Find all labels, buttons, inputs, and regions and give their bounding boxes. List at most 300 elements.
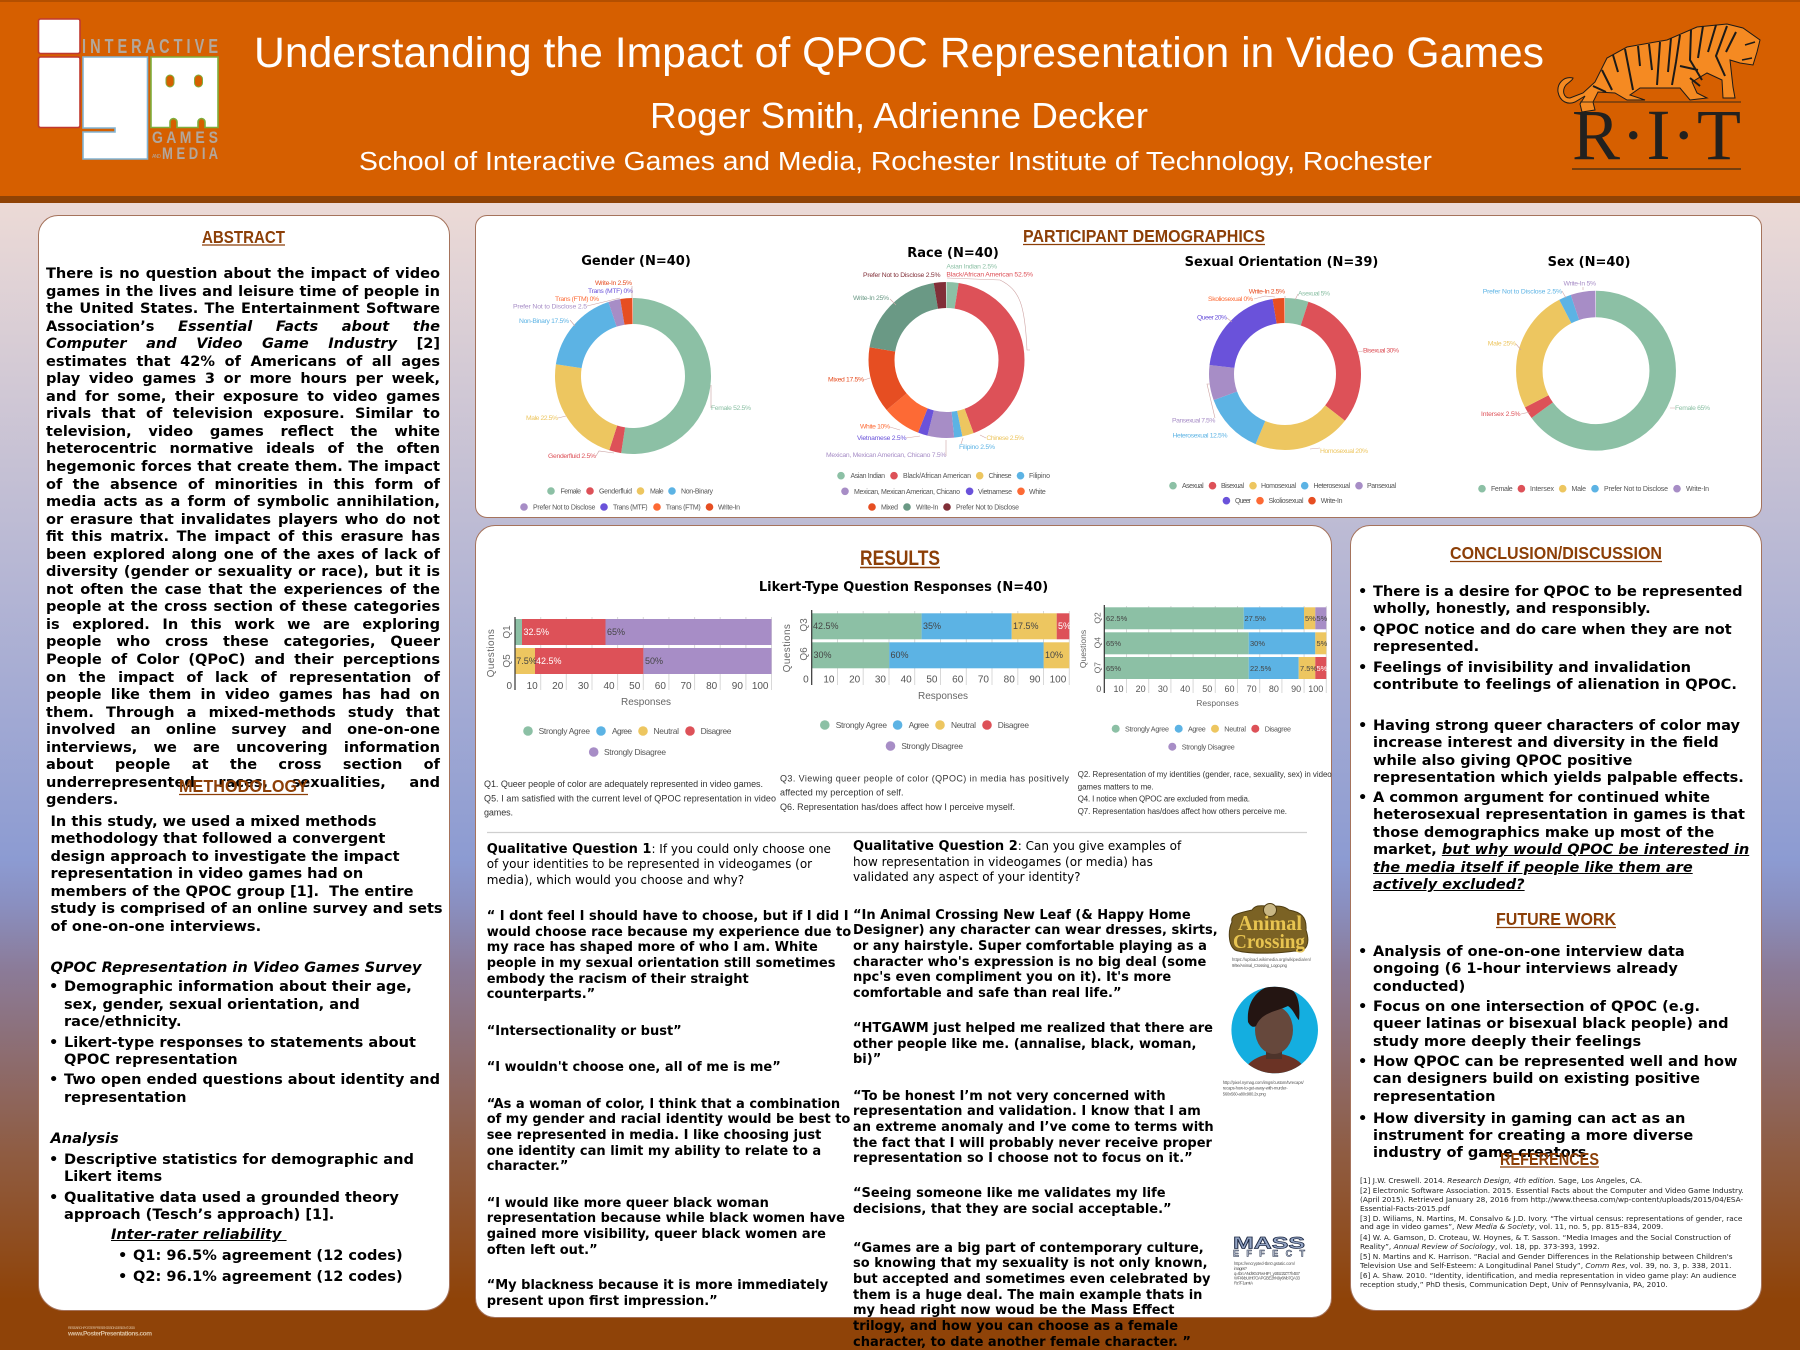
chart: Q3 and Q6 stacked bars: 60% <box>890 650 909 660</box>
text: methodology intro: study is comprised of an online survey and sets <box>50 900 443 917</box>
chart: race donut: Mixed <box>881 504 898 512</box>
future work bullet: focus: queer latinas or bisexual black people) and <box>1373 1015 1729 1032</box>
chart: Q2, Q4 and Q7 stacked bars: 80 <box>1269 684 1279 694</box>
chart: sexual orientation donut: Asexual 5% <box>1298 290 1330 298</box>
chart: Q3 and Q6 stacked bars: Strongly Agree <box>836 720 887 730</box>
bullet: qualitative data <box>64 1188 399 1223</box>
future work bullet: analysis: ongoing (6 1-hour interviews already <box>1373 960 1678 977</box>
chart: gender donut: Write-In <box>718 504 740 512</box>
future work bullet: diversity: instrument for creating a more diverse <box>1373 1127 1693 1144</box>
chart: race donut: Race (N=40) <box>907 246 999 261</box>
logo: IGM Interactive Games and Media: G A M E S <box>152 128 218 147</box>
divider between charts and qualitative answers <box>487 832 1307 834</box>
chart: sex donut: Write-In <box>1686 486 1709 493</box>
chart: Q2, Q4 and Q7 stacked bars: 30 <box>1158 684 1168 694</box>
image caption: Animal Crossing source: https://upload.wikimedia.org/wikipedia/en/ <box>1232 957 1312 962</box>
logo: IGM Interactive Games and Media: M E D I A <box>162 144 218 163</box>
chart: sex donut: Intersex <box>1530 486 1554 493</box>
logo: IGM Interactive Games and Media: I N T E R A C T I V E <box>82 36 218 58</box>
chart: sex donut <box>1478 255 1710 493</box>
quote: validates decisions: “Seeing someone like me validates my life <box>853 1186 1166 1201</box>
image caption: Mass Effect source: WFKkbUIHt7OAPGBE2hN9y6Nb7QA33 <box>1234 1276 1301 1281</box>
references list: [6] A. Shaw. 2010. “Identity, identification, and media representation in video game play: An audience <box>1360 1271 1736 1280</box>
image caption: Mass Effect source: https://encrypted-tbn0.gstatic.com/ <box>1234 1261 1296 1266</box>
image caption: portrait source <box>1223 1080 1305 1096</box>
chart: race donut: Black/African American 52.5% <box>946 272 1033 278</box>
chart: sex donut: Male 25% <box>1488 340 1516 348</box>
conclusion bullet: common argument: those demographics make up most of the <box>1373 824 1714 841</box>
quote: should not have to choose: counterparts.” <box>487 987 595 1002</box>
text: abstract: people at the cross section of these categories <box>46 598 440 615</box>
chart: race donut: Write-In <box>916 504 938 512</box>
image caption: portrait source: recaps-how-to-get-away-with-murder- <box>1223 1086 1288 1091</box>
qualitative question 1: media), which would you choose and why? <box>487 873 744 887</box>
chart: sexual orientation donut: Skoliosexual <box>1268 498 1304 505</box>
chart: sexual orientation donut: Write-In 2.5% <box>1249 288 1285 296</box>
chart: Q2, Q4 and Q7 stacked bars: Q4 <box>1092 637 1102 648</box>
chart: Q3 and Q6 stacked bars: 50 <box>926 674 938 686</box>
quote: HTGAWM: bi)” <box>853 1052 881 1067</box>
quote: not concerned: an extreme anomaly and I’ve come to terms with <box>853 1120 1214 1135</box>
text: abstract: them. Through a mixed-methods study that <box>46 704 440 721</box>
chart: sex donut: Prefer Not to Disclose <box>1604 486 1668 493</box>
chart: Q1 and Q5 stacked bars: 30 <box>578 681 589 692</box>
chart: Q3 and Q6 stacked bars: Q6 <box>799 647 810 661</box>
qualitative question 1 <box>487 842 831 887</box>
chart: Q2, Q4 and Q7 stacked bars: 5% <box>1316 664 1328 673</box>
future work bullet: analysis <box>1373 943 1685 995</box>
quote: Mass Effect <box>853 1240 1210 1350</box>
bullet: open ended questions: representation <box>64 1089 186 1106</box>
text: abstract: involved an online survey and one-on-one <box>46 721 440 738</box>
conclusion bullet: notice <box>1373 621 1732 656</box>
text: abstract: people like them in video games has had on <box>46 686 440 703</box>
quote: my blackness: present upon first impression.” <box>487 1294 718 1309</box>
references list: Essential-Facts-2015.pdf <box>1360 1204 1450 1213</box>
chart: Q2, Q4 and Q7 stacked bars: 50 <box>1202 684 1212 694</box>
text: abstract: rivals that of television exposure. Similar to <box>46 405 440 422</box>
quote: not concerned: the fact that I will probably never receive proper <box>853 1136 1212 1151</box>
image: Mass Effect logo: EFFECT <box>1233 1248 1306 1258</box>
conclusion bullet: notice: represented. <box>1373 638 1479 655</box>
chart: sex donut: Sex (N=40) <box>1548 255 1630 270</box>
quote: should not have to choose: people in my sexual orientation still sometimes <box>487 956 835 971</box>
conclusion bullet: common argument: actively excluded? <box>1373 876 1525 893</box>
text: abstract: on the impact of lack of representation of <box>46 669 440 686</box>
quote: HTGAWM <box>853 1021 1213 1067</box>
conclusion bullet: desire: wholly, honestly, and responsibly. <box>1373 600 1651 617</box>
conclusion bullet: strong characters: while also giving QPOC positive <box>1373 752 1632 769</box>
references list: Reality”, Annual Review of Sociology, vol. 18, pp. 373-393, 1992. <box>1360 1242 1600 1250</box>
chart: gender donut: Trans (FTM) <box>666 504 701 512</box>
text: methodology intro <box>50 813 443 935</box>
text: abstract: been explored along one of the axes of lack of <box>46 546 440 563</box>
chart: Q2, Q4 and Q7 stacked bars: games matters to me. <box>1078 782 1154 791</box>
text: abstract: Association’s Essential Facts about the <box>46 318 440 335</box>
quote: not concerned: representation so I choose not to focus on it.” <box>853 1151 1193 1166</box>
text: methodology intro: methodology that followed a convergent <box>50 830 385 847</box>
image caption: portrait source: http://pixel.nymag.com/imgs/custom/tvrecaps/ <box>1223 1080 1305 1085</box>
chart: Q1 and Q5 stacked bars: 65% <box>607 627 625 637</box>
chart: gender donut <box>513 254 751 512</box>
chart: Q1 and Q5 stacked bars: Responses <box>621 697 671 708</box>
chart: Q1 and Q5 stacked bars: Agree <box>612 726 632 736</box>
chart: Q3 and Q6 stacked bars: 10 <box>823 674 835 686</box>
chart: gender donut: Genderfluid 2.5% <box>548 453 596 460</box>
quote: woman of color <box>487 1096 850 1174</box>
chart: sex donut: Male <box>1572 486 1586 493</box>
bullet: demographic information <box>64 978 412 1031</box>
chart: Q1 and Q5 stacked bars: Questions <box>486 629 497 677</box>
conclusion bullet: notice: QPOC notice and do care when they are not <box>1373 621 1732 638</box>
chart: gender donut: Trans (MTF) <box>613 504 648 512</box>
text: methodology intro: design approach to investigate the impact <box>50 848 400 865</box>
chart: sexual orientation donut: Homosexual 20% <box>1320 448 1368 455</box>
chart: gender donut: Female <box>560 488 581 496</box>
chart: sexual orientation donut: Heterosexual 12.5% <box>1172 432 1228 440</box>
bullet: Q1 agreement: Q1: 96.5% agreement (12 codes) <box>133 1247 403 1264</box>
chart: sexual orientation donut: Bisexual 30% <box>1363 348 1399 354</box>
quote: Animal Crossing: npc's even compliment you on it). It's more <box>853 970 1171 985</box>
chart: Q1 and Q5 stacked bars: Q1 <box>502 625 513 639</box>
quote: not concerned: “To be honest I’m not very concerned with <box>853 1088 1166 1104</box>
logo: RIT tiger <box>1558 24 1760 175</box>
quote: Mass Effect: character, to date another female character. ” <box>853 1335 1191 1350</box>
quote: Mass Effect: trilogy, and how you can choose as a female <box>853 1319 1178 1334</box>
quote: should not have to choose <box>487 909 851 1002</box>
text: methodology intro: representation in video games had on <box>50 865 363 882</box>
future work bullet: focus: study more deeply their feelings <box>1373 1033 1641 1050</box>
quote: queer black woman: representation because while black women have <box>487 1211 845 1226</box>
bullet: Likert responses: Likert-type responses to statements about <box>64 1034 416 1050</box>
future work bullet: analysis: conducted) <box>1373 978 1465 995</box>
chart: Q2, Q4 and Q7 stacked bars: Q7 <box>1092 662 1102 673</box>
chart: sexual orientation donut: Sexual Orientation (N=39) <box>1185 255 1378 270</box>
chart: Q2, Q4 and Q7 stacked bars: Disagree <box>1265 724 1291 734</box>
conclusion bullet: strong characters: representation which yields palpable effects. <box>1373 769 1744 786</box>
chart: sexual orientation donut: Heterosexual <box>1314 483 1350 490</box>
quote: woman of color: character.” <box>487 1159 568 1174</box>
image caption: Animal Crossing source <box>1232 957 1312 968</box>
quote: Animal Crossing: comfortable and safe than real life.” <box>853 986 1122 1001</box>
chart: Q1 and Q5 stacked bars: Strongly Disagree <box>604 747 666 757</box>
text: abstract <box>46 265 440 808</box>
conclusion bullet: common argument: A common argument for continued white <box>1373 789 1710 806</box>
text: methodology intro: members of the QPOC group [1]. The entire <box>50 883 414 900</box>
quote: woman of color: one identity can limit my ability to relate to a <box>487 1144 821 1159</box>
references list: [2] Electronic Software Association. 2015. Essential Facts about the Computer and Video Game Industry. <box>1360 1186 1744 1195</box>
chart: race donut: White <box>1029 489 1046 496</box>
chart: Q2, Q4 and Q7 stacked bars: Q2 <box>1092 612 1102 624</box>
future work bullet: analysis: Analysis of one-on-one interview data <box>1373 943 1685 960</box>
chart: Q2, Q4 and Q7 stacked bars: 65% <box>1106 664 1121 673</box>
chart: gender donut: Trans (MTF) 0% <box>588 288 633 295</box>
chart: race donut: Vietnamese 2.5% <box>857 435 906 442</box>
references list: [5] N. Martins and K. Harrison. “Racial and Gender Differences in the Relationship between Children's <box>1360 1252 1733 1261</box>
chart: Q2, Q4 and Q7 stacked bars: Responses <box>1196 698 1239 708</box>
text: abstract: There is no question about the impact of video <box>46 265 440 282</box>
footer: poster presentations credit <box>67 1326 152 1338</box>
image: Animal Crossing logo: Animal <box>1238 911 1302 935</box>
panel: results <box>475 525 1332 1318</box>
chart: Q2, Q4 and Q7 stacked bars: 10 <box>1113 684 1124 694</box>
chart: Q2, Q4 and Q7 stacked bars: 7.5% <box>1300 664 1317 673</box>
chart: race donut: Asian Indian 2.5% <box>946 264 997 270</box>
bullet: descriptive statistics: Descriptive statistics for demographic and <box>64 1151 414 1168</box>
chart: Q1 and Q5 stacked bars: 0 <box>506 681 512 692</box>
text: abstract: people who cross these categories, Queer <box>46 633 440 650</box>
image: Annalise portrait <box>1231 985 1318 1080</box>
quote: woman of color: “As a woman of color, I think that a combination <box>487 1096 840 1112</box>
chart: Q1 and Q5 stacked bars: 7.5% <box>516 656 537 666</box>
chart: Q1 and Q5 stacked bars: Q5. I am satisfied with the current level of QPOC representation in video <box>484 794 776 804</box>
chart: sex donut: Prefer Not to Disclose 2.5% <box>1483 288 1562 296</box>
chart: race donut: Chinese 2.5% <box>986 435 1024 442</box>
chart: Q1 and Q5 stacked bars: 32.5% <box>524 627 549 637</box>
chart: sex donut: Female <box>1491 486 1513 493</box>
chart: Q3 and Q6 stacked bars: 30 <box>875 674 886 686</box>
text: abstract: media acts as a form of symbolic annihilation, <box>46 493 440 510</box>
chart: Q1 and Q5 stacked bars: 20 <box>552 681 564 692</box>
quote: HTGAWM: “HTGAWM just helped me realized that there are <box>853 1021 1213 1036</box>
text: abstract: genders. <box>46 791 118 808</box>
chart: sexual orientation donut <box>1169 255 1399 505</box>
future work bullet: how represented: can designers build on existing positive <box>1373 1070 1700 1087</box>
chart: Q2, Q4 and Q7 stacked bars: 5% <box>1305 614 1316 623</box>
chart: Q2, Q4 and Q7 stacked bars: 30% <box>1250 639 1265 648</box>
chart: Q1 and Q5 stacked bars: 60 <box>655 681 666 692</box>
references list: [4] W. A. Gamson, D. Croteau, W. Hoynes, & T. Sasson. “Media Images and the Social Construction of <box>1360 1233 1731 1242</box>
references list: [1] J.W. Creswell. 2014. Research Design, 4th edition. Sage, Los Angeles, CA. <box>1360 1176 1642 1185</box>
future work bullet: diversity: How diversity in gaming can act as an <box>1373 1110 1685 1126</box>
quote: not concerned: representation and validation. I know that I am <box>853 1104 1201 1119</box>
qualitative question 2: how representation in videogames (or media) has <box>853 855 1153 869</box>
chart: Q2, Q4 and Q7 stacked bars: 62.5% <box>1106 614 1128 623</box>
chart: Q2, Q4 and Q7 stacked bars: 5% <box>1316 639 1328 648</box>
image caption: Animal Crossing source: 9/9e/Animal_Crossing_Logo.png <box>1232 963 1288 968</box>
chart: Q2, Q4 and Q7 stacked bars: 27.5% <box>1244 614 1266 623</box>
chart: race donut: Prefer Not to Disclose <box>956 504 1019 512</box>
heading: future work: FUTURE WORK <box>1496 909 1616 929</box>
chart: race donut: Filipino 2.5% <box>959 444 995 451</box>
conclusion bullet: common argument: the media itself if people like them are <box>1373 859 1693 876</box>
quote: Animal Crossing <box>853 908 1218 1001</box>
subheading: analysis: Analysis <box>50 1130 119 1147</box>
chart: sexual orientation donut: Asexual <box>1182 483 1204 490</box>
heading: participant demographics: PARTICIPANT DEMOGRAPHICS <box>1023 226 1265 246</box>
future work bullet: diversity <box>1373 1110 1693 1162</box>
qualitative question 1: of your identities to be represented in videogames (or <box>487 857 812 871</box>
chart: sexual orientation donut: Skoliosexual 0% <box>1208 296 1253 303</box>
chart: Q3 and Q6 stacked bars: 40 <box>901 674 912 686</box>
bullet: descriptive statistics <box>64 1151 414 1186</box>
chart: Q1 and Q5 stacked bars: 70 <box>680 681 692 692</box>
quote: validates decisions <box>853 1186 1172 1217</box>
chart: Q3 and Q6 stacked bars: 20 <box>849 674 861 686</box>
future work bullet: how represented: How QPOC can be represented well and how <box>1373 1053 1737 1070</box>
image: Mass Effect logo <box>1233 1234 1306 1258</box>
quote: not concerned <box>853 1088 1214 1166</box>
quote: Mass Effect: my head right now woud be the Mass Effect <box>853 1303 1174 1318</box>
chart: Q3 and Q6 stacked bars: 5% <box>1058 621 1071 631</box>
quote: all of me: “I wouldn't choose one, all of me is me” <box>487 1060 781 1075</box>
chart: gender donut: Gender (N=40) <box>581 254 691 269</box>
chart: race donut: Mexican, Mexican American, Chicano <box>854 489 960 496</box>
text: abstract: games in the lives and leisure time of people in <box>46 283 440 300</box>
text: abstract: estimates that 42% of Americans of all ages <box>46 353 440 370</box>
chart: gender donut: Trans (FTM) 0% <box>555 296 599 303</box>
text: abstract: People of Color (QPoC) and their perceptions <box>46 651 440 668</box>
chart: Q1 and Q5 stacked bars: 80 <box>706 681 718 692</box>
chart: Q2, Q4 and Q7 stacked bars: 20 <box>1136 684 1146 694</box>
chart: sex donut: Intersex 2.5% <box>1481 411 1521 418</box>
future work bullet: how represented: representation <box>1373 1088 1495 1105</box>
quote: Mass Effect: them is a huge deal. The main example thats in <box>853 1288 1202 1303</box>
chart: Q1 and Q5 stacked bars: games. <box>484 808 513 818</box>
chart: Q1 and Q5 stacked bars: 40 <box>603 681 615 692</box>
conclusion bullet: strong characters <box>1373 717 1744 787</box>
chart: Q3 and Q6 stacked bars: 35% <box>923 621 941 631</box>
image: Animal Crossing logo: Crossing <box>1233 931 1305 953</box>
chart: race donut: Mixed 17.5% <box>828 376 864 384</box>
text: abstract: hegemonic forces that create them. The impact <box>46 458 440 475</box>
quote: should not have to choose: would choose race because my experience due to <box>487 924 851 940</box>
quote: queer black woman <box>487 1196 845 1258</box>
quote: my blackness: “My blackness because it is more immediately <box>487 1278 828 1293</box>
conclusion bullet: invisibility: contribute to feelings of alienation in QPOC. <box>1373 676 1737 693</box>
quote: Animal Crossing: or any hairstyle. Super comfortable playing as a <box>853 939 1207 954</box>
references list: and age in video games”, New Media & Society, vol. 11, no. 5, pp. 815–834, 2009. <box>1360 1222 1663 1231</box>
chart: race donut: Vietnamese <box>978 489 1012 496</box>
footer: poster presentations credit: RESEARCH POSTER PRESENTATION DESIGN © 2015 <box>68 1326 135 1330</box>
chart: sex donut: Write-In 5% <box>1564 280 1596 288</box>
bullet: open ended questions: Two open ended questions about identity and <box>64 1071 440 1088</box>
text: abstract: underrepresented races, sexualities, and <box>46 774 440 791</box>
chart: Q1 and Q5 stacked bars: 10 <box>527 681 538 692</box>
bullet: Likert responses: QPOC representation <box>64 1051 238 1068</box>
chart: Q2, Q4 and Q7 stacked bars: Agree <box>1188 724 1206 734</box>
chart: gender donut: Non-Binary <box>681 488 714 496</box>
chart: Q2, Q4 and Q7 stacked bars: Questions <box>1078 630 1088 668</box>
chart: Q1 and Q5 stacked bars: Disagree <box>701 726 732 736</box>
chart subtitle: Likert responses: Likert-Type Question Responses (N=40) <box>759 580 1048 595</box>
chart: Q2, Q4 and Q7 stacked bars: 40 <box>1180 684 1190 694</box>
chart: Q2, Q4 and Q7 stacked bars: 0 <box>1096 684 1101 694</box>
header band <box>0 0 1800 203</box>
chart: sexual orientation donut: Bisexual <box>1221 483 1244 490</box>
conclusion bullet: common argument <box>1373 789 1749 894</box>
references list <box>1360 1176 1744 1288</box>
quote: Animal Crossing: Designer) any character can wear dresses, skirts, <box>853 923 1218 938</box>
bullet: Likert responses <box>64 1034 416 1068</box>
subheading: survey: QPOC Representation in Video Games Survey <box>50 959 422 976</box>
text: abstract: of the absence of minorities in this form of <box>46 476 440 493</box>
chart: Q2, Q4 and Q7 stacked bars: Strongly Agree <box>1125 724 1169 734</box>
chart: Q3 and Q6 stacked bars: affected my perception of self. <box>780 788 904 798</box>
chart: Q3 and Q6 stacked bars: 30% <box>814 650 832 660</box>
chart: Q2, Q4 and Q7 stacked bars: Q7. Representation has/does affect how others perceive me. <box>1078 807 1287 816</box>
text: abstract: the United States. The Entertainment Software <box>46 300 440 317</box>
image: Mass Effect logo: MASS <box>1233 1234 1305 1252</box>
chart: Q2, Q4 and Q7 stacked bars: Strongly Disagree <box>1182 742 1235 752</box>
references list: reception study,” PhD thesis, Communication Dept, Univ of Pennsylvania, PA, 2010. <box>1360 1280 1668 1288</box>
text: abstract: or erasure that invalidates players who do not <box>46 511 440 528</box>
future work bullet: focus: Focus on one intersection of QPOC (e.g. <box>1373 998 1700 1015</box>
qualitative question 2 <box>853 839 1182 884</box>
panel: abstract and methodology <box>38 215 450 1311</box>
chart: Q3 and Q6 stacked bars: 0 <box>803 674 809 686</box>
chart: race donut: Black/African American <box>903 473 971 480</box>
quote: should not have to choose: embody the racism of their straight <box>487 972 749 987</box>
chart: Q2, Q4 and Q7 stacked bars: 70 <box>1247 684 1257 694</box>
chart: Q3 and Q6 stacked bars: Q3. Viewing queer people of color (QPOC) in media has positively <box>780 774 1070 784</box>
quote: Animal Crossing: “In Animal Crossing New Leaf (& Happy Home <box>853 908 1191 922</box>
chart: Q1 and Q5 stacked bars <box>484 617 776 818</box>
bullet: qualitative data: approach (Tesch’s approach) [1]. <box>64 1206 334 1223</box>
chart: race donut <box>826 246 1050 512</box>
conclusion bullet: desire: There is a desire for QPOC to be represented <box>1373 582 1743 600</box>
chart: gender donut: Prefer Not to Disclose 2.5 <box>513 304 587 310</box>
image caption: Mass Effect source: images? <box>1234 1266 1248 1271</box>
text: methodology intro: of one-on-one interviews. <box>50 918 261 935</box>
chart: Q3 and Q6 stacked bars: Questions <box>782 624 793 672</box>
text: abstract: fit this matrix. The impact of this erasure has <box>46 528 440 545</box>
chart: Q1 and Q5 stacked bars: 100 <box>752 681 769 692</box>
panel: conclusion, future work and references <box>1350 525 1762 1311</box>
chart: Q3 and Q6 stacked bars: 90 <box>1029 674 1041 686</box>
chart: Q3 and Q6 stacked bars: Q3 <box>799 618 810 632</box>
logo: RIT tiger: R·I·T <box>1572 95 1741 175</box>
chart: Q2, Q4 and Q7 stacked bars: 65% <box>1106 639 1121 648</box>
chart: Q1 and Q5 stacked bars: 50% <box>645 656 663 666</box>
chart: Q3 and Q6 stacked bars: Responses <box>918 691 968 702</box>
chart: race donut: White 10% <box>860 424 890 430</box>
quote: intersectionality: “Intersectionality or bust” <box>487 1024 682 1038</box>
conclusion bullet: strong characters: increase interest and diversity in the field <box>1373 734 1719 751</box>
bullet: descriptive statistics: Likert items <box>64 1168 162 1185</box>
chart: Q3 and Q6 stacked bars: 80 <box>1004 674 1015 686</box>
heading: results: RESULTS <box>860 547 940 570</box>
image: Animal Crossing logo <box>1229 904 1308 953</box>
conclusion bullet: invisibility: Feelings of invisibility and invalidation <box>1373 659 1691 676</box>
text: abstract: Computer and Video Game Industry [2] <box>46 335 440 352</box>
chart: Q1 and Q5 stacked bars: Q1. Queer people of color are adequately represented in video games. <box>484 779 763 789</box>
quote: Mass Effect: so knowing that my sexuality is not only known, <box>853 1256 1208 1271</box>
chart: race donut: Chinese <box>988 473 1012 480</box>
chart: sexual orientation donut: Queer <box>1235 498 1252 505</box>
chart: Q3 and Q6 stacked bars: Disagree <box>998 720 1029 730</box>
qualitative question 2: validated any aspect of your identity? <box>853 870 1081 884</box>
conclusion bullet: desire <box>1373 582 1743 617</box>
text: abstract: interviews, we are uncovering information <box>46 739 440 756</box>
chart: Q1 and Q5 stacked bars: Q5 <box>502 654 513 668</box>
quote: Mass Effect: “Games are a big part of contemporary culture, <box>853 1240 1204 1256</box>
chart: gender donut: Male 22.5% <box>526 415 558 422</box>
authors: Roger Smith, Adrienne Decker <box>650 95 1148 136</box>
chart: Q2, Q4 and Q7 stacked bars: 22.5% <box>1250 664 1272 673</box>
chart: gender donut: Male <box>650 488 664 496</box>
quote: queer black woman: often left out.” <box>487 1243 598 1258</box>
chart: race donut: Write-In 25% <box>853 295 889 302</box>
chart: gender donut: Genderfluid <box>599 488 632 496</box>
chart: Q1 and Q5 stacked bars: Strongly Agree <box>539 726 590 736</box>
quote: my blackness <box>487 1278 828 1309</box>
text: abstract: is explored. In this work we are exploring <box>46 616 440 633</box>
image caption: Mass Effect source <box>1234 1261 1301 1286</box>
quote: queer black woman: gained more visibility, queer black women are <box>487 1227 826 1242</box>
text: abstract: heterocentric normative ideals of the often <box>46 440 440 457</box>
references list: (April 2015). Retrieved January 28, 2016 from http://www.theesa.com/wp-content/uploads/2015/04/ESA- <box>1360 1195 1743 1204</box>
